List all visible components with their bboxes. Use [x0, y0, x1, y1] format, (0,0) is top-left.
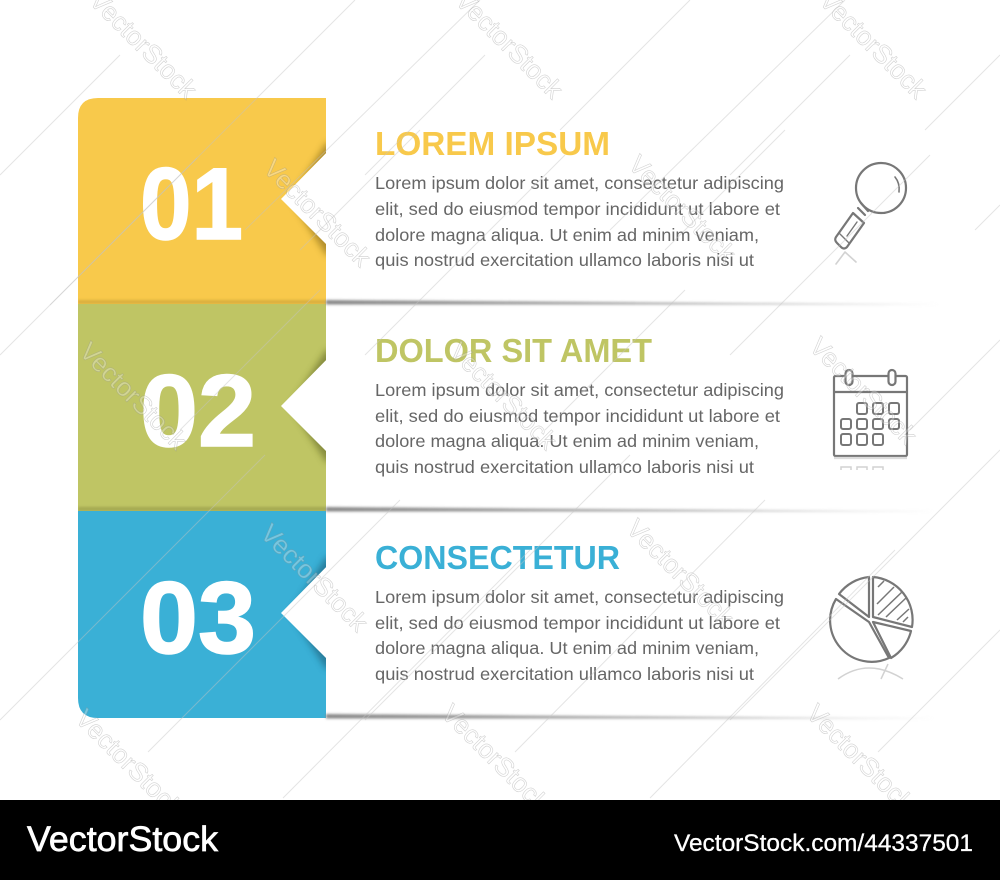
watermark text: VectorStock	[621, 513, 741, 633]
number 02: 02	[140, 354, 256, 468]
number 03: 03	[140, 561, 256, 675]
heading: step 2: DOLOR SIT AMET	[375, 332, 652, 369]
watermark text: VectorStock	[804, 331, 924, 451]
text block: step 2: Lorem ipsum dolor sit amet, consectetur adipiscing	[375, 380, 784, 400]
text block: step 1: Lorem ipsum dolor sit amet, consectetur adipiscing	[375, 173, 784, 193]
text block: step 3: quis nostrud exercitation ullamco laboris nisi ut	[375, 664, 754, 684]
panel: step 2	[78, 304, 345, 511]
watermark text: VectorStock	[623, 149, 743, 269]
watermark text: VectorStock	[258, 153, 378, 273]
text block: step 1: elit, sed do eiusmod tempor incididunt ut labore et	[375, 199, 780, 219]
watermark text: VectorStock	[255, 518, 375, 638]
footer url: VectorStock.com/44337501	[674, 830, 973, 857]
footer brand: VectorStock	[27, 820, 219, 859]
heading: step 1: LOREM IPSUM	[375, 125, 610, 162]
panel: step 3	[78, 511, 345, 718]
divider shadow 1	[326, 300, 940, 304]
heading: step 3: CONSECTETUR	[375, 539, 620, 576]
watermark text: VectorStock	[74, 336, 194, 456]
text block: step 3: Lorem ipsum dolor sit amet, consectetur adipiscing	[375, 587, 784, 607]
divider shadow 2	[326, 507, 935, 512]
icon: pie chart	[830, 577, 913, 679]
text block: step 2	[375, 380, 784, 477]
panel: step 1	[78, 98, 345, 304]
text block: step 1: quis nostrud exercitation ullamco laboris nisi ut	[375, 250, 754, 270]
watermark text: VectorStock	[444, 336, 564, 456]
text block: step 3: dolore magna aliqua. Ut enim ad minim veniam,	[375, 638, 759, 658]
text block: step 3	[375, 587, 784, 684]
text block: step 1: dolore magna aliqua. Ut enim ad minim veniam,	[375, 225, 759, 245]
icon: magnifying glass	[835, 163, 906, 264]
text block: step 3: elit, sed do eiusmod tempor incididunt ut labore et	[375, 613, 780, 633]
number 01: 01	[140, 147, 243, 261]
watermark text: VectorStock	[70, 703, 190, 823]
text block: step 2: quis nostrud exercitation ullamco laboris nisi ut	[375, 457, 754, 477]
text block: step 2: dolore magna aliqua. Ut enim ad minim veniam,	[375, 431, 759, 451]
text block: step 2: elit, sed do eiusmod tempor incididunt ut labore et	[375, 406, 780, 426]
watermark text: VectorStock	[436, 698, 556, 818]
text block: step 1	[375, 173, 784, 270]
watermark text: VectorStock	[801, 698, 921, 818]
icon: calendar	[834, 370, 907, 470]
divider shadow 3	[326, 714, 935, 718]
footer bar	[0, 800, 1000, 880]
